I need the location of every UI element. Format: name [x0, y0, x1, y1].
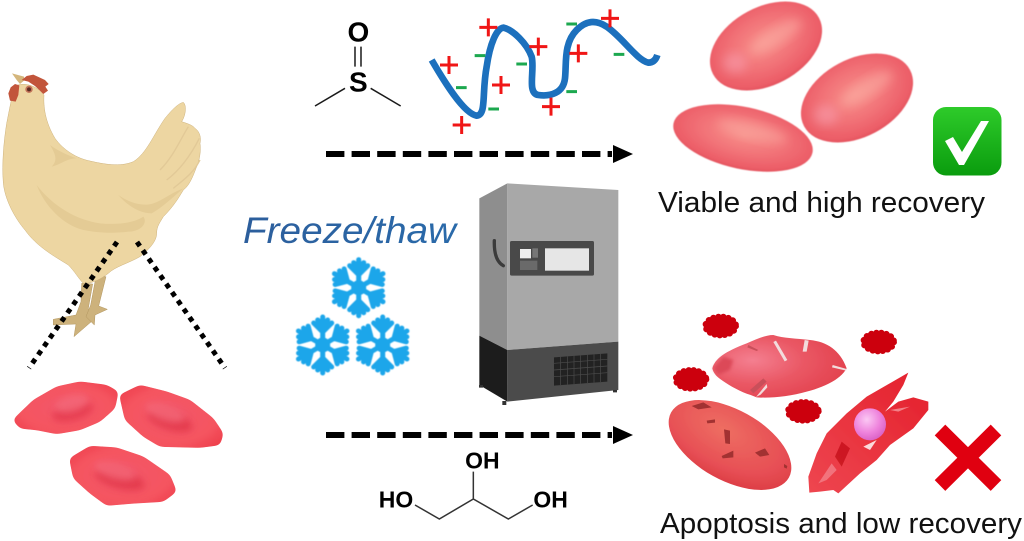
- icon: red cross: [940, 430, 996, 486]
- icon: green check mark: [933, 107, 1002, 176]
- debris fragments: [676, 317, 894, 420]
- healthy red blood cells: [667, 0, 928, 183]
- freezer feet: [481, 385, 615, 405]
- left hydroxyl: HO: [379, 487, 413, 513]
- freezer door: [507, 183, 618, 350]
- chicken comb and wattle: [8, 75, 49, 102]
- chicken eye: [25, 86, 33, 93]
- glycerol bonds: [415, 472, 533, 519]
- chicken body: [3, 84, 200, 283]
- icon: ultra-low freezer: [479, 183, 618, 405]
- healthy cell right: [786, 35, 928, 161]
- bottom cell: [69, 446, 177, 506]
- DMSO molecule: [315, 17, 401, 106]
- charged polymer: [432, 9, 657, 134]
- right cell: [119, 385, 223, 448]
- ruptured cell: [808, 373, 928, 493]
- chicken tail feather lines: [160, 127, 200, 188]
- chicken beak: [12, 73, 24, 84]
- torn cell: [712, 335, 847, 398]
- freezer base side: [479, 336, 507, 402]
- top hydroxyl: OH: [465, 447, 500, 473]
- label: freeze/thaw: Freeze/thaw: [243, 210, 458, 251]
- chicken legs and feet: [53, 277, 107, 337]
- freezer base front: [507, 342, 618, 402]
- label: viable: Viable and high recovery: [658, 187, 985, 219]
- arrow: top dashed: [326, 145, 633, 163]
- freezer control panel: [510, 241, 594, 276]
- icon: snowflakes: [294, 260, 411, 373]
- negative charges: [456, 24, 624, 109]
- healthy cell bottom: [667, 93, 819, 183]
- damaged red blood cells: [654, 317, 928, 509]
- left cell: [13, 382, 118, 434]
- right hydroxyl: OH: [533, 487, 568, 513]
- polymer chain: [432, 22, 657, 116]
- dotted lines to the cell view: [29, 242, 225, 368]
- chicken red blood cells: [13, 382, 223, 506]
- pitted cell: [654, 381, 806, 509]
- chicken wing shading: [37, 145, 183, 233]
- arrow: bottom dashed: [326, 426, 633, 444]
- glycerol molecule: [379, 447, 568, 519]
- sulfur label: S: [349, 66, 368, 97]
- freezer vent: [554, 353, 607, 386]
- freezer handle: [494, 241, 503, 266]
- icon: chicken: [3, 73, 200, 337]
- freezer side: [479, 183, 507, 350]
- DMSO bonds: [315, 47, 401, 106]
- oxygen label: O: [347, 17, 369, 48]
- pink apoptotic sphere: [854, 408, 886, 440]
- positive charges: [440, 9, 619, 134]
- label: apoptosis: Apoptosis and low recovery: [660, 508, 1022, 540]
- healthy cell top: [695, 0, 837, 109]
